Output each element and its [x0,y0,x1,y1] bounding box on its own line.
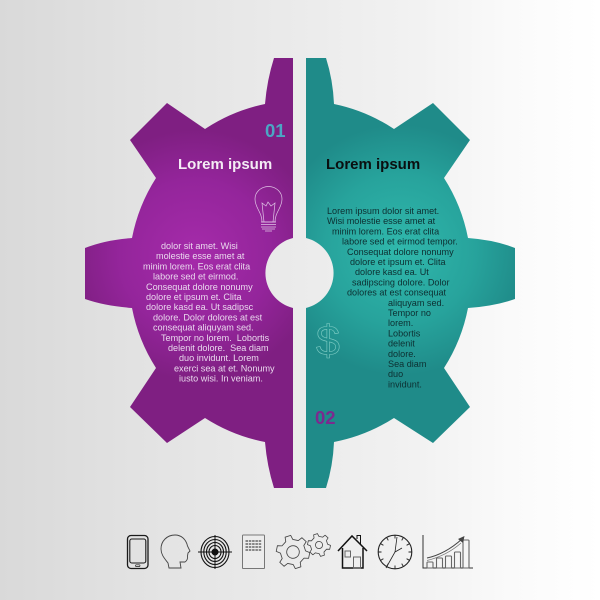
text block: right body: sadipscing dolore. Dolor [352,277,450,287]
icon row [128,532,473,571]
text block: left body [143,241,275,384]
icon: dollar sign: $ [316,317,340,365]
text block: right body: labore sed et eirmod tempor. [342,237,458,247]
text block: left body: labore sed et eirmod. [153,272,238,282]
icon: growth chart [423,535,473,568]
text block: right body: aliquyam sed. [388,298,444,308]
text block: left body: Consequat dolore nonumy [146,282,253,292]
heading: right: Lorem ipsum [326,156,420,173]
text block: left body: minim lorem. Eos erat clita [143,261,251,271]
text block: left body: delenit dolore. Sea diam [168,343,269,353]
text block: right body: Lobortis [388,328,421,338]
text block: left body: dolore. Dolor dolores at est [153,312,263,322]
text block: right body: lorem. [388,318,413,328]
text block: right body: dolore. [388,349,416,359]
text block: right body: minim lorem. Eos erat clita [332,226,440,236]
panel: left purple gear half [85,58,293,488]
icon: target [198,535,232,569]
text block: right body: delenit [388,339,415,349]
text block: left body: consequat aliquyam sed. [153,323,254,333]
panel: right teal gear half [306,58,515,488]
text block: left body: Tempor no lorem. Lobortis [161,333,270,343]
text block: right body [327,206,458,389]
number 02: 02 [315,407,336,428]
icon: document [242,535,264,568]
icon: house [338,536,367,568]
text block: right body: Wisi molestie esse amet at [327,216,436,226]
text block: left body: exerci sea at et. Nonumy [174,363,275,373]
text block: right body: Tempor no [388,308,431,318]
icon: light bulb [255,186,282,231]
icon: clock [378,535,412,569]
text block: right body: dolore et ipsum et. Clita [350,257,446,267]
icon: head profile [161,535,190,568]
text block: left body: duo invidunt. Lorem [179,353,259,363]
text block: left body: iusto wisi. In veniam. [179,374,263,384]
text block: right body: Lorem ipsum dolor sit amet. [327,206,439,216]
heading: left: Lorem ipsum [178,156,272,173]
text block: left body: dolore et ipsum et. Clita [146,292,242,302]
text block: right body: invidunt. [388,379,422,389]
text block: right body: Sea diam [388,359,426,369]
icon: gears [274,532,332,571]
text block: right body: duo [388,369,403,379]
text block: left body: molestie esse amet at [156,251,245,261]
icon: phone [128,536,148,568]
gear half shape: purple [85,58,293,488]
text block: right body: dolore kasd ea. Ut [355,267,429,277]
number 01: 01 [265,120,286,141]
text block: right body: dolores at est consequat [347,288,447,298]
text block: right body: Consequat dolore nonumy [347,247,454,257]
text block: left body: dolor sit amet. Wisi [161,241,238,251]
gear half shape: teal [306,58,515,488]
text block: left body: dolore kasd ea. Ut sadipsc [146,302,254,312]
